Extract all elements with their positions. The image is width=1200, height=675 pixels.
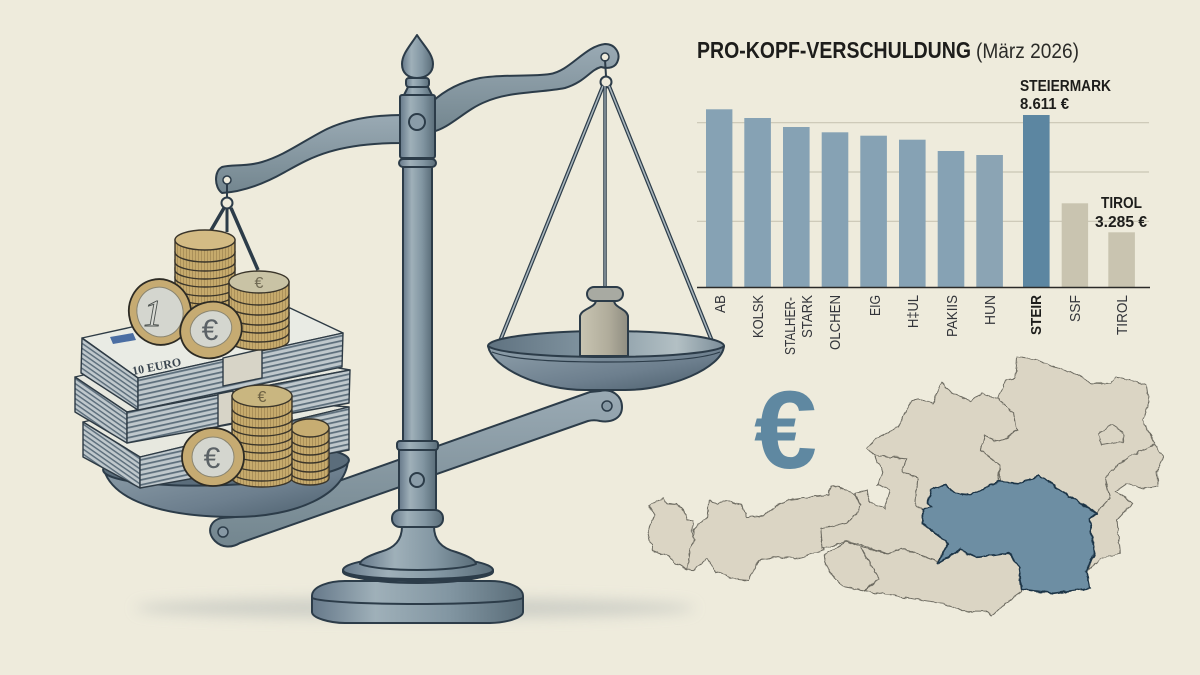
right pan	[488, 287, 724, 390]
finial	[402, 35, 433, 78]
Tirol	[686, 485, 860, 580]
blue note strip	[110, 333, 136, 344]
pillar	[312, 35, 523, 623]
Oberösterreich	[867, 382, 1017, 510]
ground shadow	[135, 598, 695, 618]
stack A	[175, 230, 235, 312]
callout: Steiermark	[1020, 78, 1111, 113]
weight	[580, 287, 628, 356]
upper beam	[216, 44, 618, 193]
axis labels: AB	[712, 295, 729, 313]
callout: Steiermark: 8.611 €	[1020, 96, 1069, 113]
Vorarlberg	[648, 498, 694, 570]
stack B: €	[255, 275, 264, 292]
axis labels: STARK	[799, 295, 816, 338]
bottom stack	[83, 395, 349, 488]
paper bands	[223, 349, 262, 386]
coin: euro upper	[173, 294, 249, 366]
stack C: €	[258, 389, 267, 406]
chart title: PRO-KOPF-VERSCHULDUNG	[697, 37, 971, 63]
bar chart	[697, 78, 1150, 355]
Niederösterreich	[981, 357, 1155, 513]
Salzburg	[821, 455, 948, 562]
axis labels: TIROL	[1114, 295, 1131, 335]
icon: euro sign: €	[754, 369, 817, 492]
axis labels: STEIR	[1028, 295, 1045, 335]
Kärnten	[860, 547, 1022, 617]
axis labels: STALHER-	[782, 297, 799, 355]
balance scale	[210, 35, 724, 623]
coin: 1 euro: 1	[144, 293, 162, 335]
axis labels: SSF	[1067, 295, 1084, 322]
axis labels: OLCHEN	[827, 295, 844, 350]
stack B	[229, 271, 289, 350]
lower beam	[210, 390, 622, 547]
middle stack	[75, 345, 350, 443]
right pan strings	[500, 60, 712, 341]
axis labels: PAKIIS	[944, 295, 961, 337]
coin stacks	[175, 230, 329, 487]
Burgenland	[1088, 445, 1163, 571]
left pan	[102, 440, 350, 517]
axis labels: EIG	[867, 295, 884, 316]
Osttirol	[824, 542, 879, 590]
chart title: (März 2026)	[976, 40, 1079, 63]
callout: Tirol: 3.285 €	[1095, 214, 1147, 231]
axis labels: KOLSK	[750, 295, 767, 338]
stack D	[291, 419, 329, 485]
map of Austria	[648, 357, 1163, 617]
note value: 10 EURO	[131, 355, 182, 378]
bars	[706, 109, 1135, 287]
large coins	[122, 272, 249, 486]
top stack	[81, 308, 343, 426]
axis labels: HUN	[982, 295, 999, 325]
coin: 1 euro	[122, 272, 198, 352]
callout: Tirol	[1095, 195, 1147, 231]
banknote stacks	[75, 308, 350, 488]
Wien	[1098, 425, 1124, 445]
callout: Steiermark: STEIERMARK	[1020, 78, 1111, 95]
coin: euro lower	[182, 428, 244, 486]
coin: euro lower: €	[204, 442, 221, 475]
left pan strings	[210, 184, 258, 270]
callout: Tirol: TIROL	[1101, 195, 1142, 212]
stack C	[232, 385, 292, 487]
coin: euro upper: €	[202, 314, 219, 347]
axis labels: H‡UL	[905, 295, 922, 328]
Steiermark	[922, 476, 1096, 593]
axis labels	[712, 295, 1131, 355]
